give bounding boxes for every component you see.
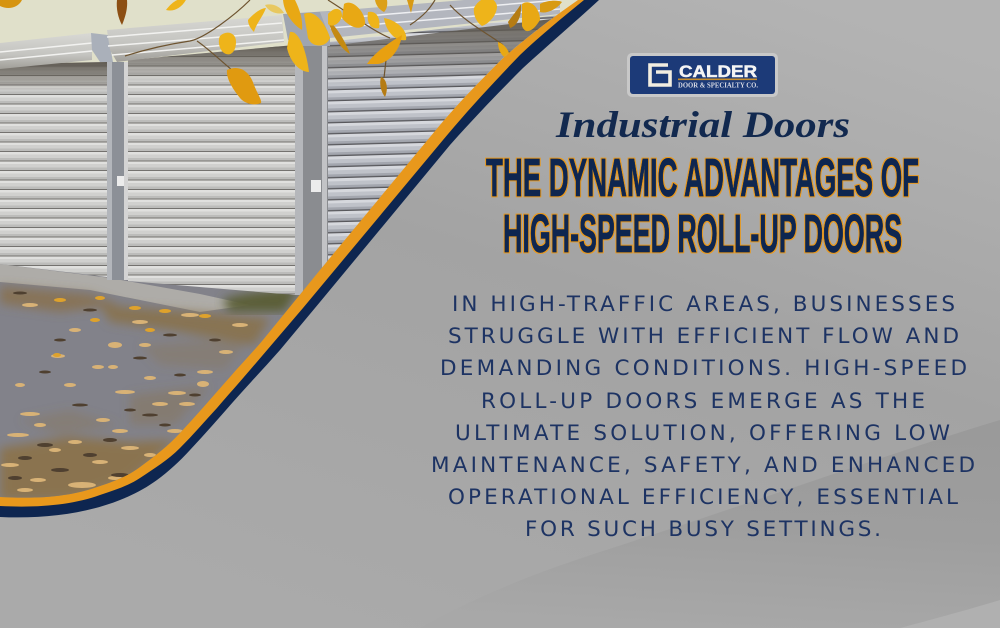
ground with fallen leaves [0, 264, 300, 498]
body text: IN HIGH-TRAFFIC AREAS, BUSINESSES [452, 292, 955, 317]
yellow autumn leaves [0, 0, 562, 104]
body text: MAINTENANCE, SAFETY, AND ENHANCED [431, 453, 975, 478]
door 1 [0, 62, 107, 277]
rolled door hoods [0, 0, 560, 69]
body text: ROLL-UP DOORS EMERGE AS THE [481, 389, 925, 414]
icon: CS monogram [650, 65, 670, 85]
logo badge [627, 53, 778, 97]
body text: DEMANDING CONDITIONS. HIGH-SPEED [440, 356, 967, 381]
door 3 [328, 16, 556, 260]
weeds [222, 285, 300, 312]
curved navy band [0, 0, 599, 517]
branches [125, 0, 503, 78]
body text: FOR SUCH BUSY SETTINGS. [525, 517, 881, 542]
curved orange band [0, 0, 584, 507]
photo: industrial roll-up doors [0, 0, 600, 520]
body text: STRUGGLE WITH EFFICIENT FLOW AND [448, 324, 959, 349]
body text [431, 292, 975, 542]
logo wordmark: CALDER [679, 63, 757, 81]
body text: OPERATIONAL EFFICIENCY, ESSENTIAL [448, 485, 958, 510]
wall [0, 0, 600, 120]
door 2 [128, 45, 295, 295]
door posts [107, 44, 328, 295]
logo tagline: DOOR & SPECIALTY CO. [678, 82, 758, 90]
heading: Industrial Doors: Industrial Doors [555, 105, 850, 146]
body text: ULTIMATE SOLUTION, OFFERING LOW [455, 421, 950, 446]
title [486, 148, 919, 264]
